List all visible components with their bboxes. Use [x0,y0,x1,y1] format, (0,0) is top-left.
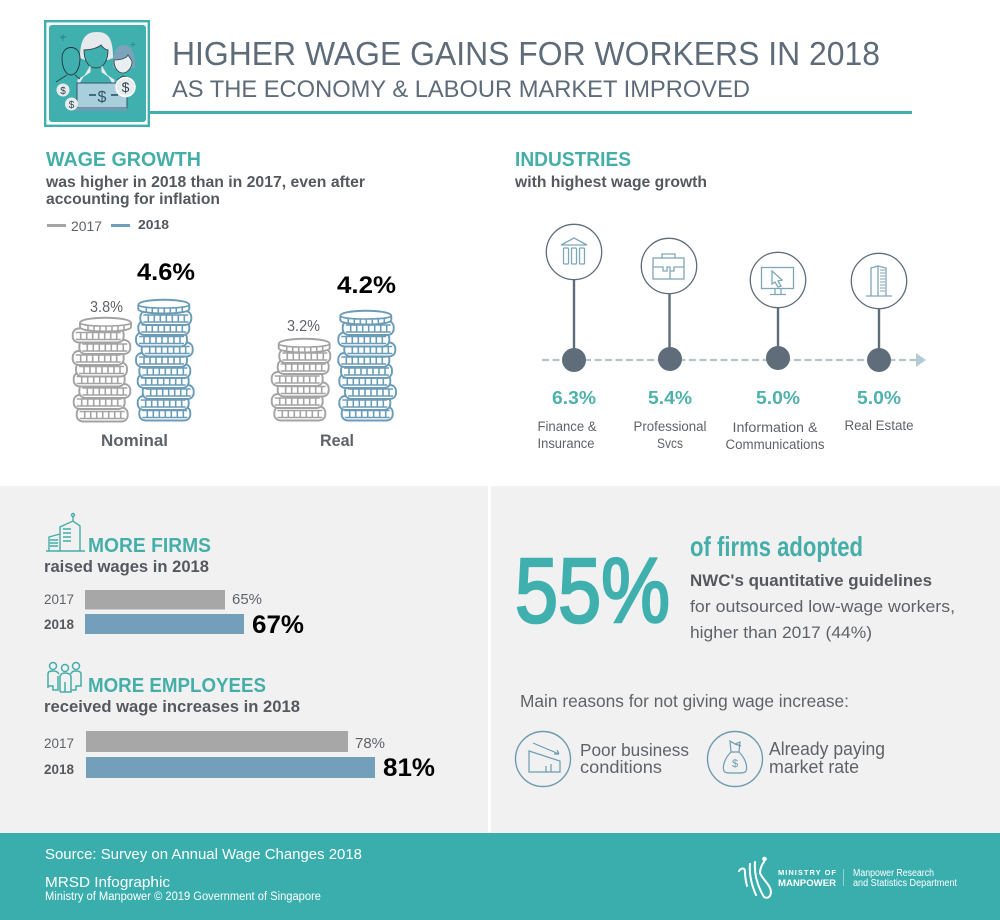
legend: 2017 [71,219,102,234]
publisher text [45,875,321,903]
chart: nominal coin stacks [73,259,195,450]
label nominal: Nominal [101,432,168,450]
more employees description: received wage increases in 2018 [44,698,300,716]
item: professional services: 5.4% [648,387,692,408]
header rule [148,111,912,114]
bar chart: employees receiving increases [44,731,435,782]
item: real estate: 5.0% [857,387,901,408]
item: information and communications: 5.0% [756,387,800,408]
item: professional services [634,238,706,451]
icon: workers with money: $ [69,100,75,111]
logo: ministry of manpower: MINISTRY OF [778,868,836,877]
item: real estate: Real Estate [844,418,914,433]
item: finance and insurance: Insurance [538,436,594,451]
item: real estate [844,253,914,433]
logo: ministry of manpower [739,857,957,898]
reasons heading: Main reasons for not giving wage increase: [520,691,849,711]
label real: Real [320,432,354,450]
heading: more firms: MORE FIRMS [88,535,211,557]
value 2017 real: 3.2% [287,318,320,335]
icon: money bag: $ [732,758,738,770]
background panel: lower right [491,486,1000,833]
wage growth description [45,174,365,208]
legend [47,217,169,234]
big stat: 55 percent: 55% [515,540,670,642]
publisher text: MRSD Infographic [45,875,170,891]
icon: people [48,662,81,692]
value 2017 nominal: 3.8% [90,299,123,316]
reason: poor business conditions: Poor business [580,740,689,760]
item: finance and insurance [538,224,602,451]
background panel: lower left [0,486,488,833]
footer band [0,833,1000,920]
heading: wage growth: WAGE GROWTH [46,149,201,171]
value 2018 real: 4.2% [337,272,396,299]
item: finance and insurance: Finance & [538,419,596,434]
logo mark [739,857,771,898]
more firms description: raised wages in 2018 [44,558,209,576]
icon: workers with money: $ [60,86,66,97]
NWC guidelines text [690,572,955,642]
publisher text: Ministry of Manpower © 2019 Government of Singapore [45,891,321,903]
NWC guidelines text: NWC's quantitative guidelines [690,572,932,590]
icon: bank [561,238,587,264]
timeline arrow [542,353,926,367]
reason: poor business conditions [516,732,689,786]
bar chart: firms raising wages: 2018 [44,617,74,632]
NWC guidelines text: for outsourced low-wage workers, [690,598,955,616]
logo: ministry of manpower: Manpower Research [853,868,934,879]
logo: ministry of manpower: and Statistics Department [853,878,957,889]
chart: real coin stacks [272,272,396,450]
bar chart: firms raising wages: 67% [252,611,304,639]
subtitle: AS THE ECONOMY & LABOUR MARKET IMPROVED [172,76,750,103]
bar chart: firms raising wages: 2017 [44,592,74,607]
2018 nominal coin stack [136,300,194,420]
reason: poor business conditions: conditions [580,757,662,777]
heading: more employees: MORE EMPLOYEES [88,675,266,697]
bar chart: employees receiving increases: 81% [383,754,435,782]
bar chart: employees receiving increases: 2018 [44,762,74,777]
icon: computer screen [762,268,794,294]
heading: industries: INDUSTRIES [515,149,631,171]
logo: ministry of manpower: MANPOWER [778,878,837,888]
icon: workers with money: $ [122,79,130,95]
reason: already paying market rate: market rate [769,757,859,777]
panel: more firms [44,514,304,639]
bar chart: employees receiving increases: 2017 [44,736,74,751]
icon: money bag [708,732,762,786]
value 2018 nominal: 4.6% [137,259,195,286]
heading: of firms adopted: of firms adopted [690,531,863,562]
icon: buildings [46,514,85,551]
item: information and communications: Communications [726,437,825,452]
item: professional services: Svcs [657,436,683,451]
icon: falling chart [516,732,570,786]
icon: briefcase [653,254,684,279]
NWC guidelines text: higher than 2017 (44%) [690,624,872,642]
bar chart: firms raising wages: 65% [232,592,262,608]
item: information and communications [726,252,825,452]
icon: workers with money: $ [98,89,107,106]
industries description: with highest wage growth [514,174,707,191]
title: HIGHER WAGE GAINS FOR WORKERS IN 2018 [172,35,880,72]
icon: workers with money [45,21,149,126]
reason: already paying market rate: Already paying [769,739,885,759]
2018 real coin stack [338,311,396,420]
icon: tower [866,266,892,296]
panel: more employees [44,662,435,782]
2017 real coin stack [272,339,330,420]
wage growth description: was higher in 2018 than in 2017, even after [45,174,365,191]
item: information and communications: Information & [732,420,818,435]
bar chart: employees receiving increases: 78% [355,736,385,752]
2017 nominal coin stack [73,318,131,422]
bar chart: firms raising wages [44,590,304,639]
item: finance and insurance: 6.3% [552,387,596,408]
wage growth description: accounting for inflation [46,191,220,208]
item: professional services: Professional [634,419,706,434]
reason: already paying market rate [708,732,885,786]
source text: Source: Survey on Annual Wage Changes 2018 [45,847,362,863]
legend: 2018 [138,217,169,232]
